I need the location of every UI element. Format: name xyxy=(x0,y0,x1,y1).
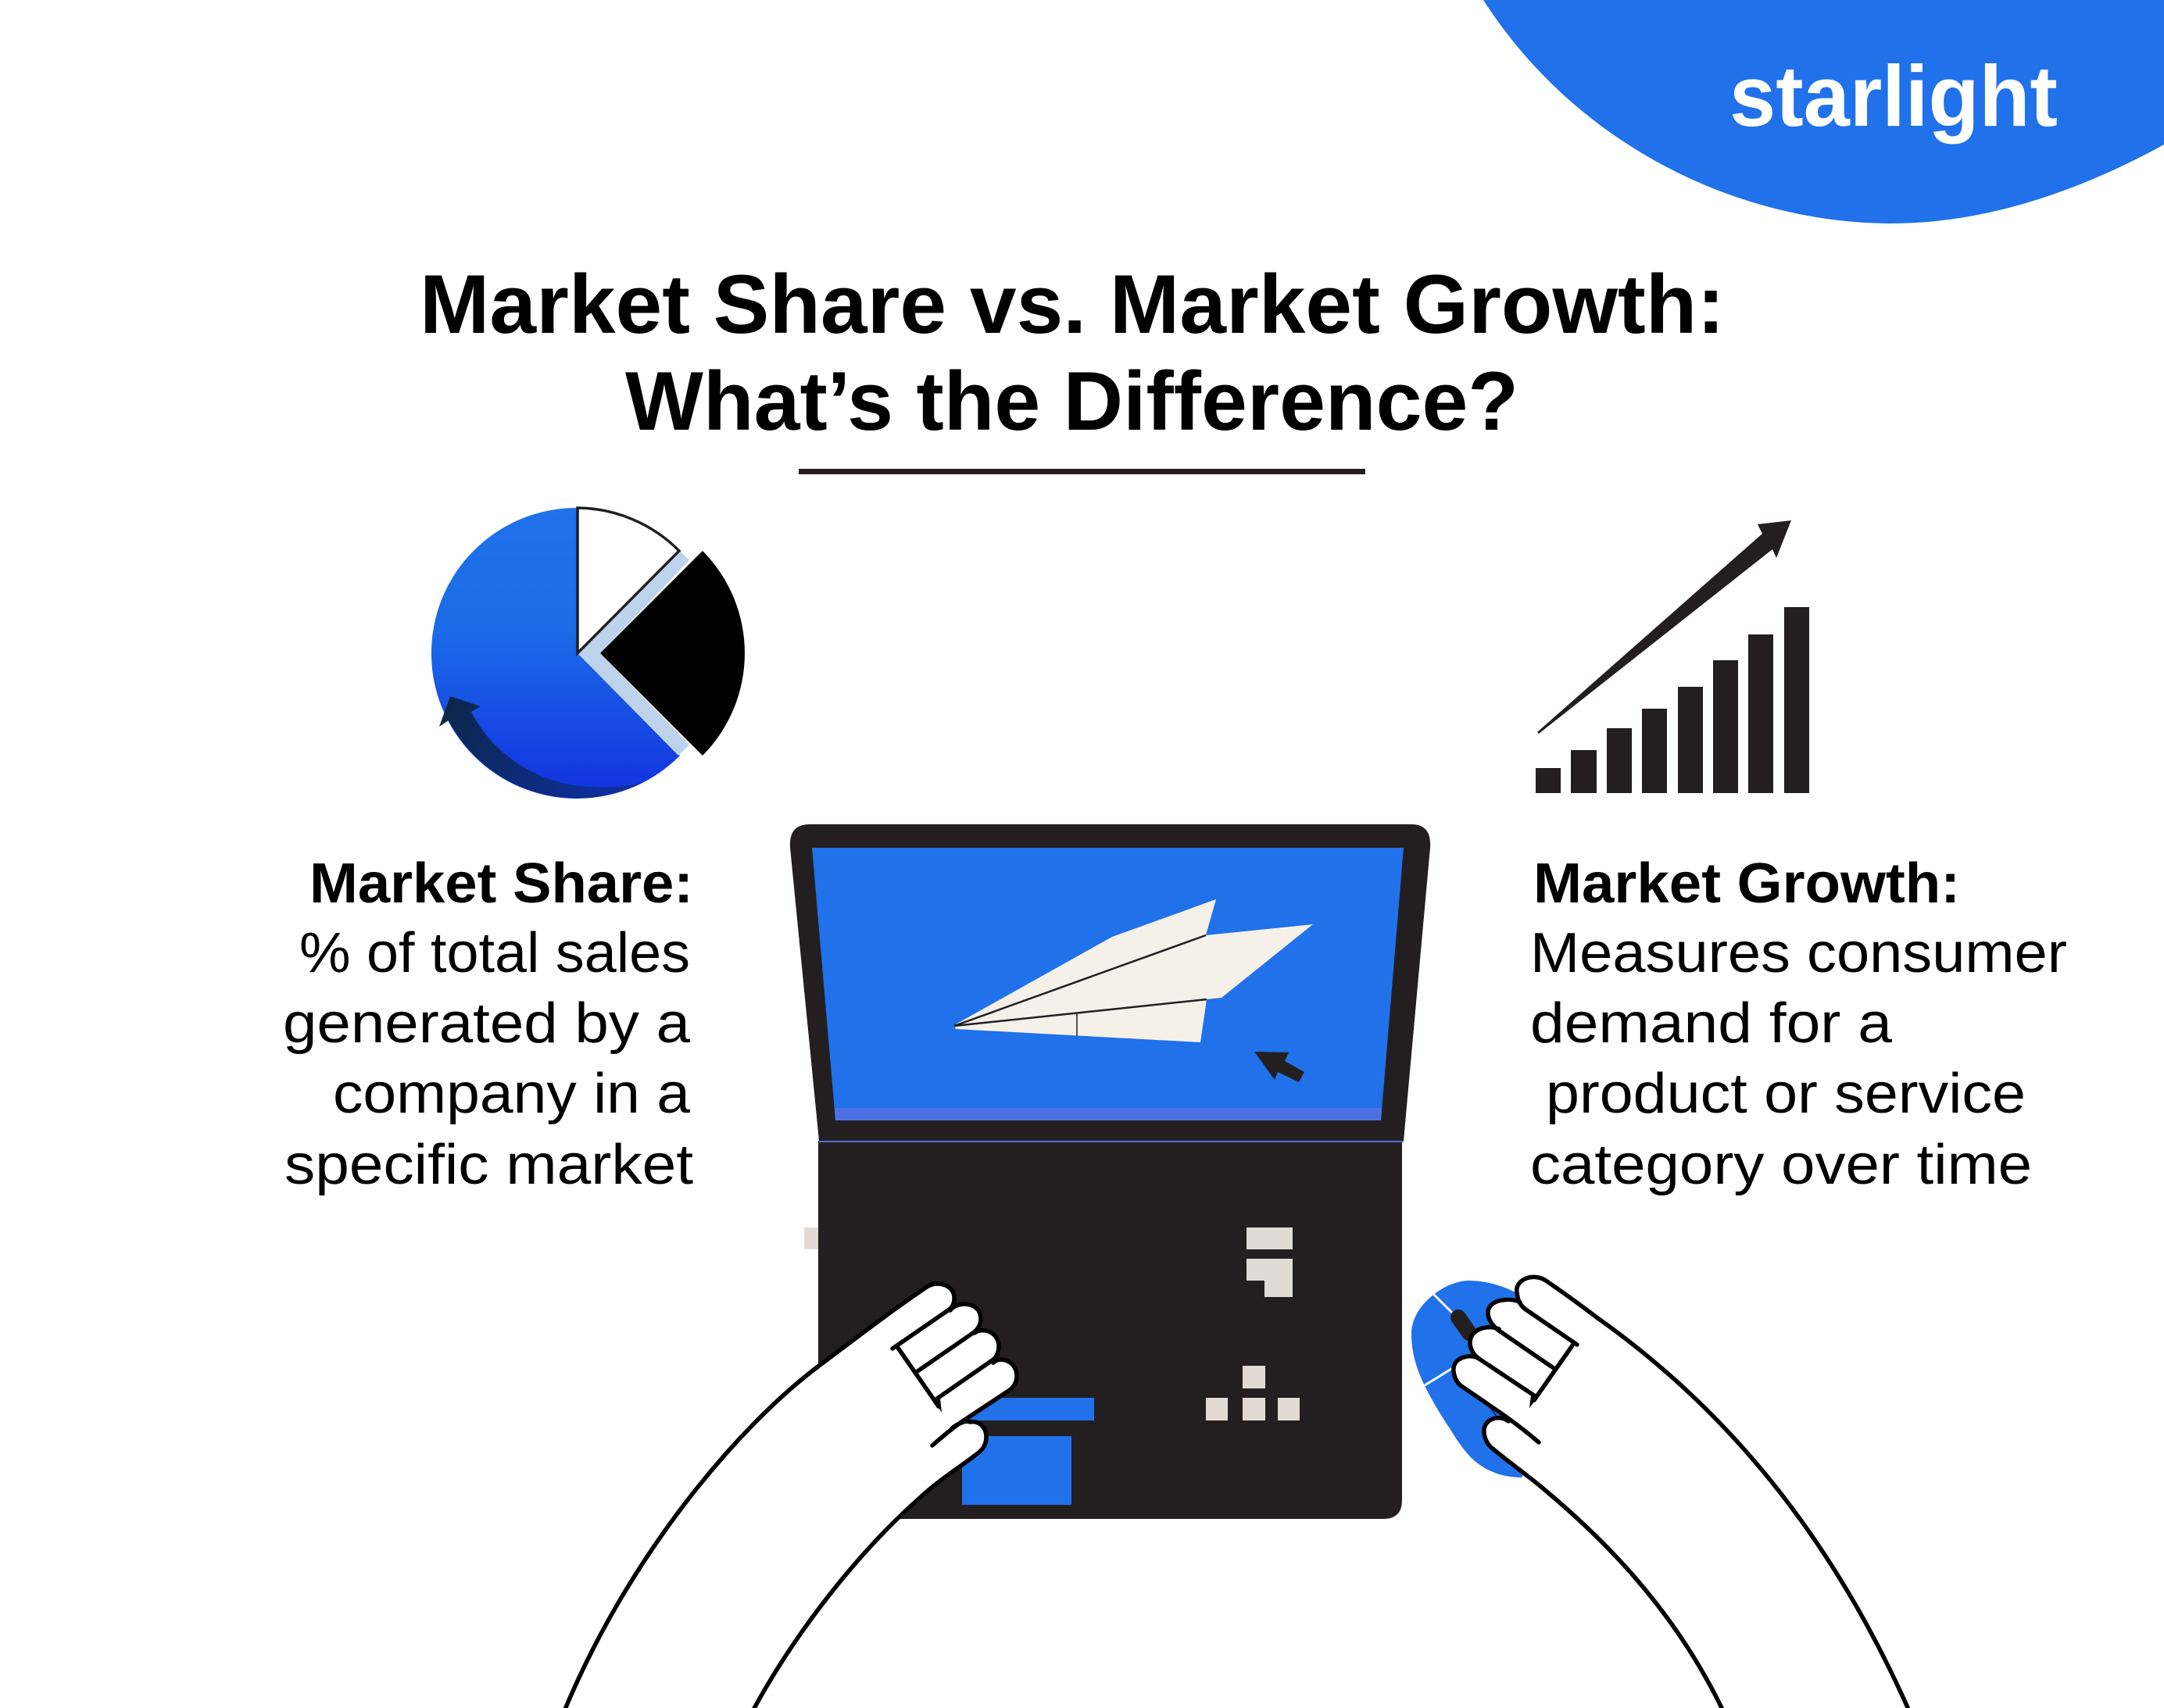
keys xyxy=(804,1227,1300,1420)
text block: market share: specific market xyxy=(284,1134,693,1196)
hinge line xyxy=(819,1141,1404,1142)
text block: market share: Market Share: xyxy=(309,852,693,915)
blue keys xyxy=(962,1398,1094,1505)
bars xyxy=(1536,607,1809,793)
pie slice: black xyxy=(600,551,745,756)
title underline xyxy=(799,469,1365,474)
left hand xyxy=(564,1284,1017,1708)
text block: market growth xyxy=(1530,852,2067,1196)
text block: market share: company in a xyxy=(333,1063,691,1125)
growth arrow xyxy=(1537,520,1791,734)
logo wordmark: starlight xyxy=(1729,48,2058,145)
text block: market share: generated by a xyxy=(283,992,691,1055)
icon: growth bar chart with arrow xyxy=(1536,520,1809,793)
text block: market growth: Measures consumer xyxy=(1530,922,2067,984)
pie slice: white xyxy=(578,508,679,653)
text block: market growth: demand for a xyxy=(1530,992,1893,1055)
title xyxy=(420,257,1725,448)
cursor arrow xyxy=(1254,1052,1304,1082)
text block: market growth: product or service xyxy=(1546,1063,2026,1125)
text block: market growth: Market Growth: xyxy=(1533,852,1960,915)
screen taskbar xyxy=(835,1108,1382,1120)
title: What’s the Difference? xyxy=(625,354,1518,448)
logo badge xyxy=(1483,0,2164,223)
right hand xyxy=(1454,1277,1909,1708)
text block: market share: % of total sales xyxy=(299,922,690,984)
laptop xyxy=(790,824,1430,1519)
laptop screen xyxy=(812,848,1404,1120)
pie slice: pale blue gap xyxy=(578,551,689,756)
icon: pie chart xyxy=(431,508,745,799)
laptop lid xyxy=(790,824,1430,1141)
icon: computer mouse xyxy=(1411,1281,1563,1478)
text block: market growth: category over time xyxy=(1530,1134,2032,1196)
laptop base xyxy=(818,1141,1402,1519)
arrow around pie xyxy=(439,696,642,799)
text block: market share xyxy=(283,852,693,1196)
pie slice: blue majority xyxy=(431,508,680,799)
title: Market Share vs. Market Growth: xyxy=(420,257,1725,351)
paper plane xyxy=(954,899,1313,1042)
